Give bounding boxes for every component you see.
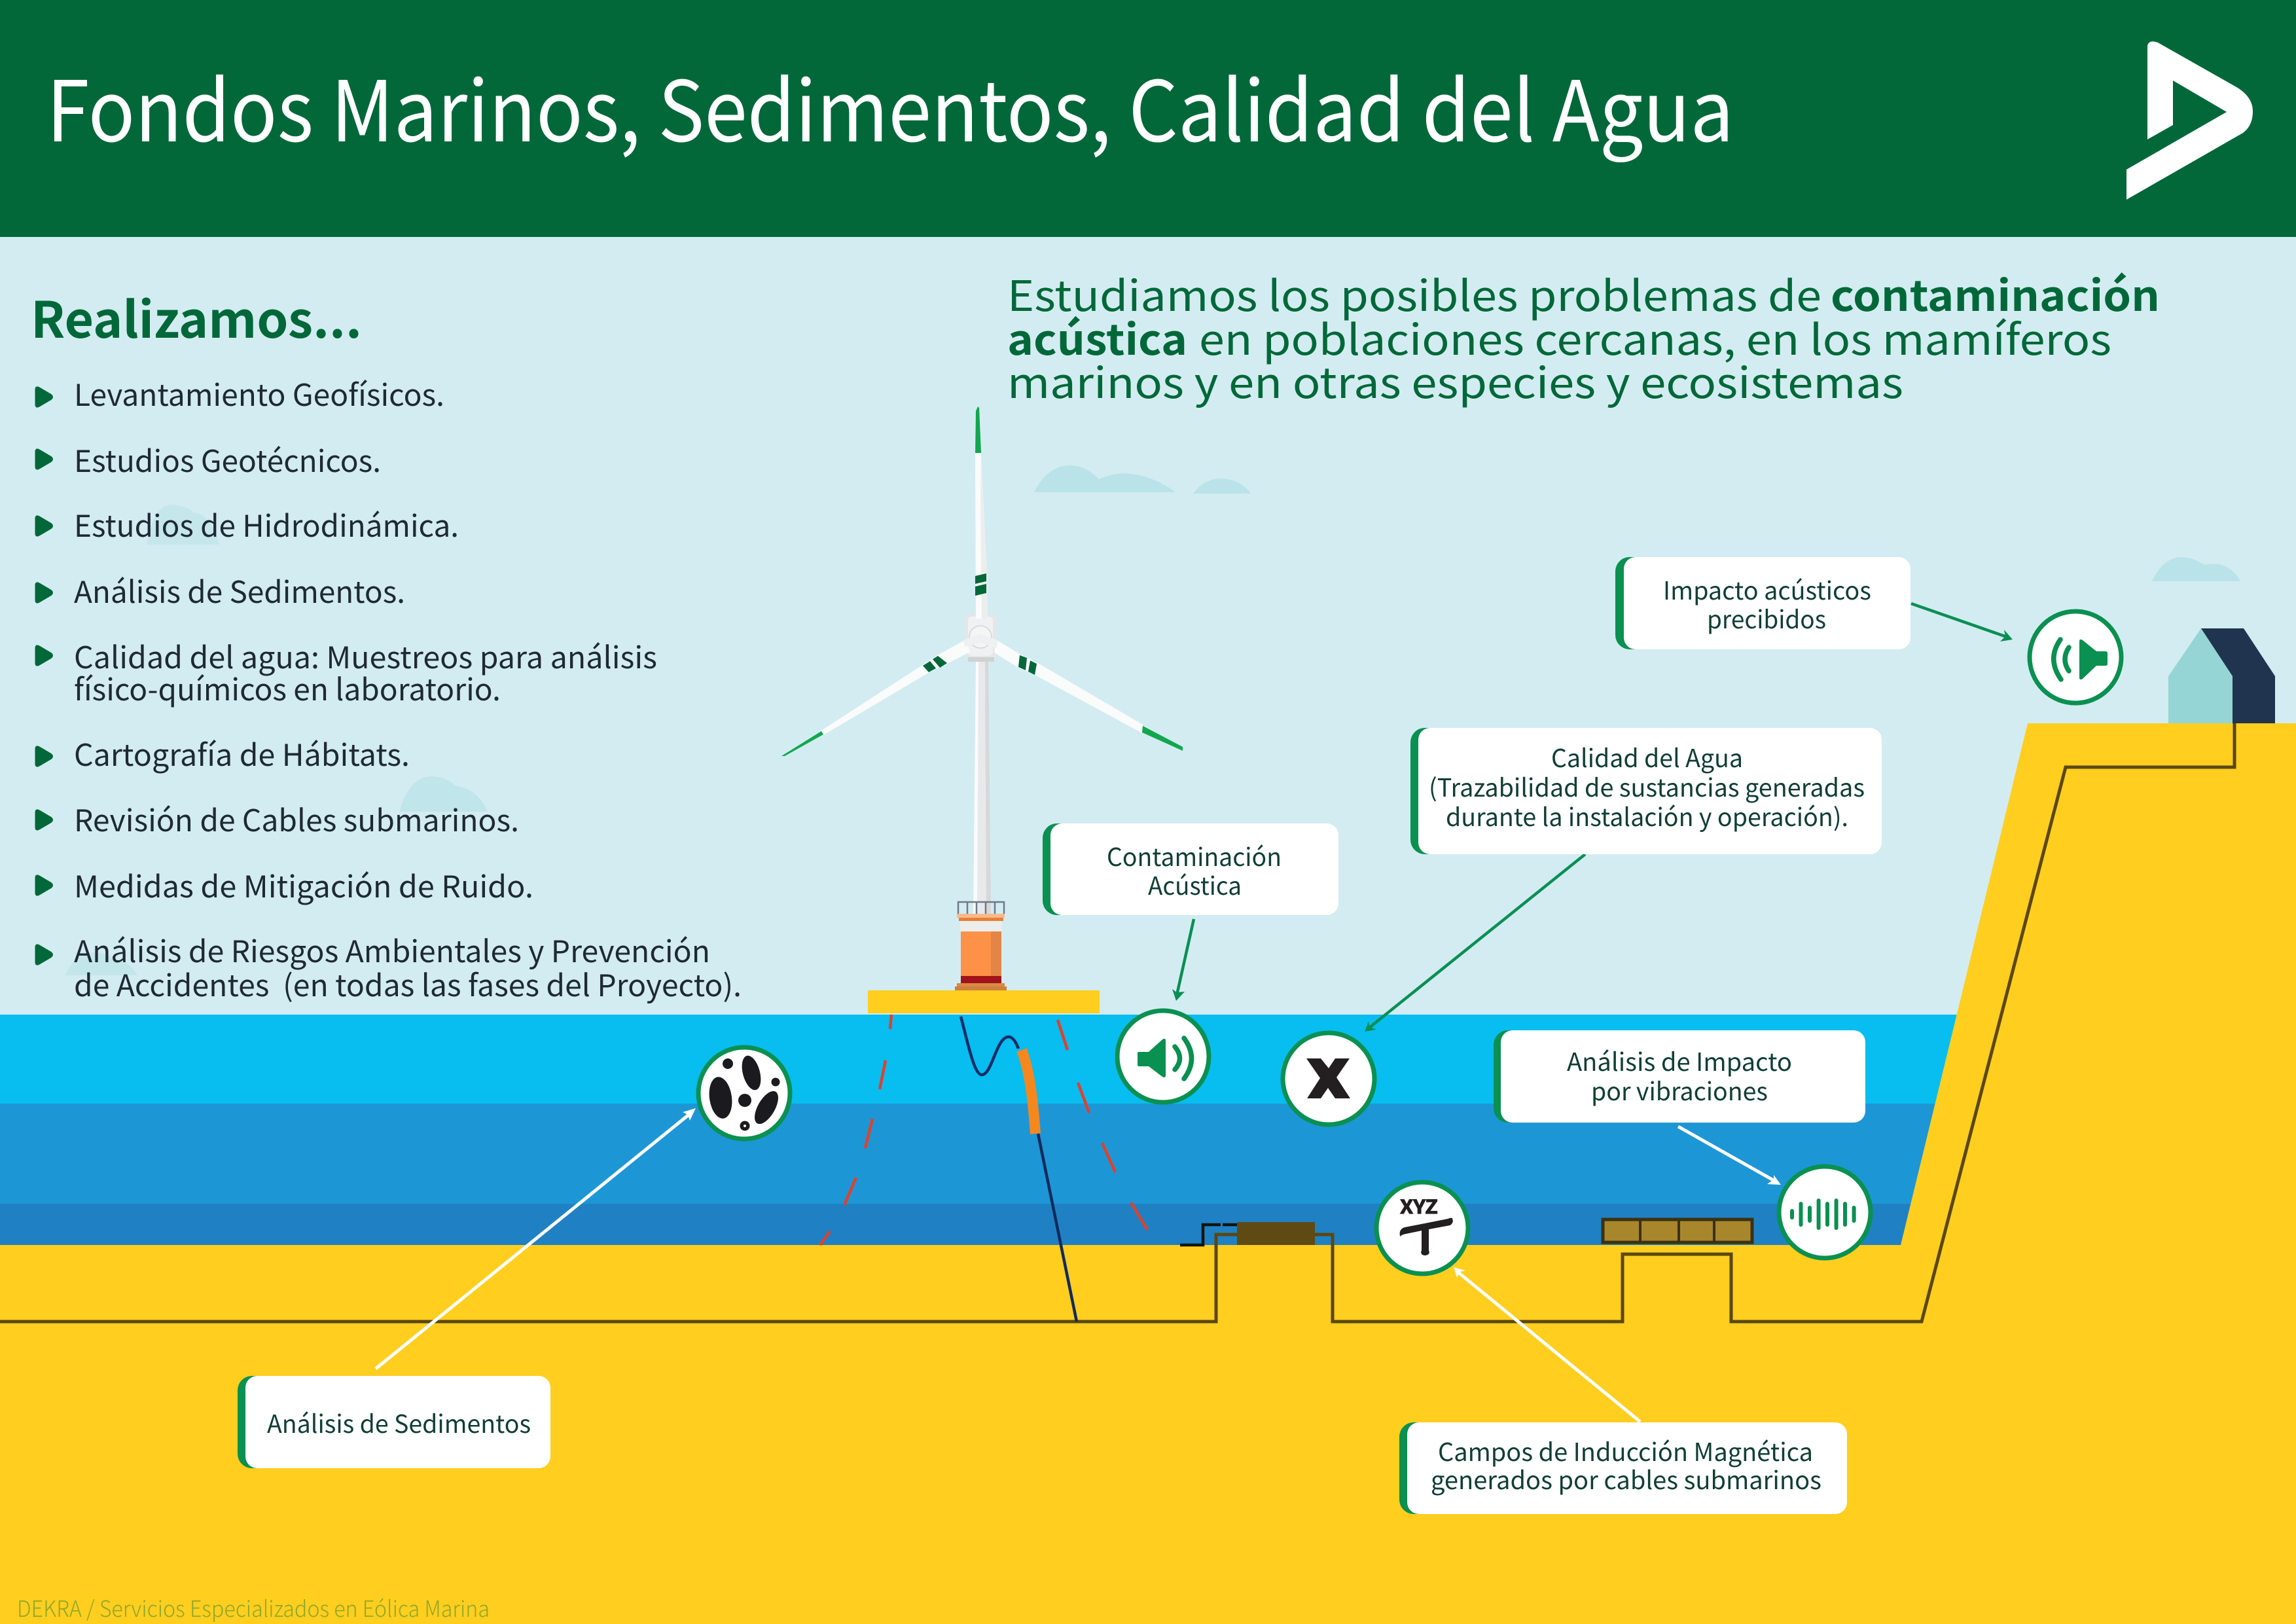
title: Fondos Marinos, Sedimentos, Calidad del Agua [46, 45, 1734, 166]
list item: Cartografía: Cartografía de Hábitats. [74, 732, 410, 775]
icon: magnetic field XYZ [1376, 1182, 1468, 1274]
callout: Campos de Inducción Magnética [1399, 1422, 1847, 1514]
list item: Riesgos: de Accidentes (en todas las fases del Proyecto). [74, 962, 742, 1005]
icon: magnetic field XYZ: XYZ [1400, 1192, 1438, 1219]
cable protection mattress [1603, 1219, 1752, 1242]
heading: Realizamos: Realizamos... [31, 280, 362, 352]
callout: Campos de Inducción Magnética: generados por cables submarinos [1431, 1460, 1821, 1496]
dynamic cable [961, 1017, 1077, 1322]
list item: Calidad del agua [36, 634, 657, 710]
seabed and coast [0, 723, 2296, 1624]
arrow: sedimentos [376, 1108, 696, 1369]
callout: Calidad del Agua: Calidad del Agua [1551, 738, 1743, 774]
list item: Sedimentos: Análisis de Sedimentos. [74, 569, 405, 612]
callout: Análisis de Sedimentos [238, 1376, 550, 1468]
list item: Mitigación: Medidas de Mitigación de Ruido. [74, 863, 533, 907]
callout: Impacto acústicos: precibidos [1707, 600, 1826, 636]
nacelle [965, 614, 997, 662]
arrow: impacto to speaker [1911, 604, 2013, 641]
blade: left [781, 640, 970, 756]
blade: right [994, 640, 1183, 751]
list item: Hidrodinámica: Estudios de Hidrodinámica. [74, 503, 459, 546]
floating platform [868, 990, 1100, 1013]
statement text: contaminación [1831, 263, 2160, 323]
icon: water quality X [1283, 1033, 1374, 1125]
arrow: calidad to X [1365, 854, 1585, 1032]
arrow: vibraciones [1678, 1127, 1781, 1185]
railing [958, 902, 1004, 914]
list item: Geotécnicos: Estudios Geotécnicos. [74, 438, 381, 481]
icon: speaker on land [2030, 611, 2121, 703]
icon: sediments [698, 1047, 790, 1139]
transition piece [955, 914, 1007, 990]
wind turbine [781, 406, 1183, 990]
turbine tower [973, 659, 991, 916]
callout: Campos de Inducción Magnética: Campos de Inducción Magnética [1438, 1432, 1813, 1468]
callout: Análisis de Impacto por vibraciones: Análisis de Impacto [1567, 1042, 1792, 1078]
list item: Riesgos: Análisis de Riesgos Ambientales y Prevención [74, 928, 710, 971]
icon: vibration wave [1779, 1166, 1871, 1258]
icon: speaker at sea [1117, 1011, 1209, 1102]
list of services [36, 372, 742, 1005]
callout: Contaminación Acústica: Acústica [1148, 866, 1242, 902]
list item: Levantamiento: Levantamiento Geofísicos. [74, 372, 444, 415]
callout: Análisis de Impacto por vibraciones: por vibraciones [1591, 1072, 1768, 1108]
callout: Calidad del Agua: durante la instalación y operación). [1446, 797, 1848, 833]
logo [2126, 41, 2253, 200]
statement text: Estudiamos los posibles problemas de [1007, 263, 1821, 323]
header band [0, 0, 2296, 237]
statement text: acústica [1007, 307, 1187, 367]
list item: Cables: Revisión de Cables submarinos. [74, 797, 519, 840]
arrow: contaminación to speaker [1172, 919, 1194, 1001]
callout: Impacto acústicos: Impacto acústicos [1663, 571, 1871, 607]
callout: Análisis de Impacto por vibraciones [1494, 1030, 1865, 1123]
statement text [1007, 263, 2160, 410]
list item: Riesgos [36, 928, 742, 1005]
arrow: campos magnéticos [1454, 1267, 1640, 1422]
footer credit: DEKRA / Servicios Especializados en Eólica Marina [17, 1591, 490, 1623]
callout: Calidad del Agua: (Trazabilidad de sustancias generadas [1429, 768, 1865, 804]
blade: top [975, 406, 988, 619]
house [2168, 628, 2275, 723]
callout: Contaminación Acústica: Contaminación [1107, 837, 1282, 873]
sea layers [0, 1015, 1964, 1246]
black exposed cable [1180, 1225, 1237, 1245]
submarine power cable [0, 723, 2234, 1322]
callout: Contaminación Acústica [1043, 823, 1338, 915]
callout: Calidad del Agua [1410, 728, 1882, 854]
mooring lines [820, 1015, 1147, 1245]
statement text: en poblaciones cercanas, en los mamíferos [1199, 307, 2111, 367]
list item: Calidad del agua: físico-químicos en laboratorio. [74, 666, 501, 710]
callout: Análisis de Sedimentos: Análisis de Sedimentos [267, 1404, 531, 1440]
callout: Impacto acústicos [1615, 557, 1910, 649]
list item: Calidad del agua: Calidad del agua: Muestreos para análisis [74, 634, 657, 677]
statement text: marinos y en otras especies y ecosistemas [1007, 350, 1903, 410]
clouds [65, 465, 2240, 975]
scour protection box [1237, 1222, 1315, 1245]
hub [963, 626, 997, 648]
